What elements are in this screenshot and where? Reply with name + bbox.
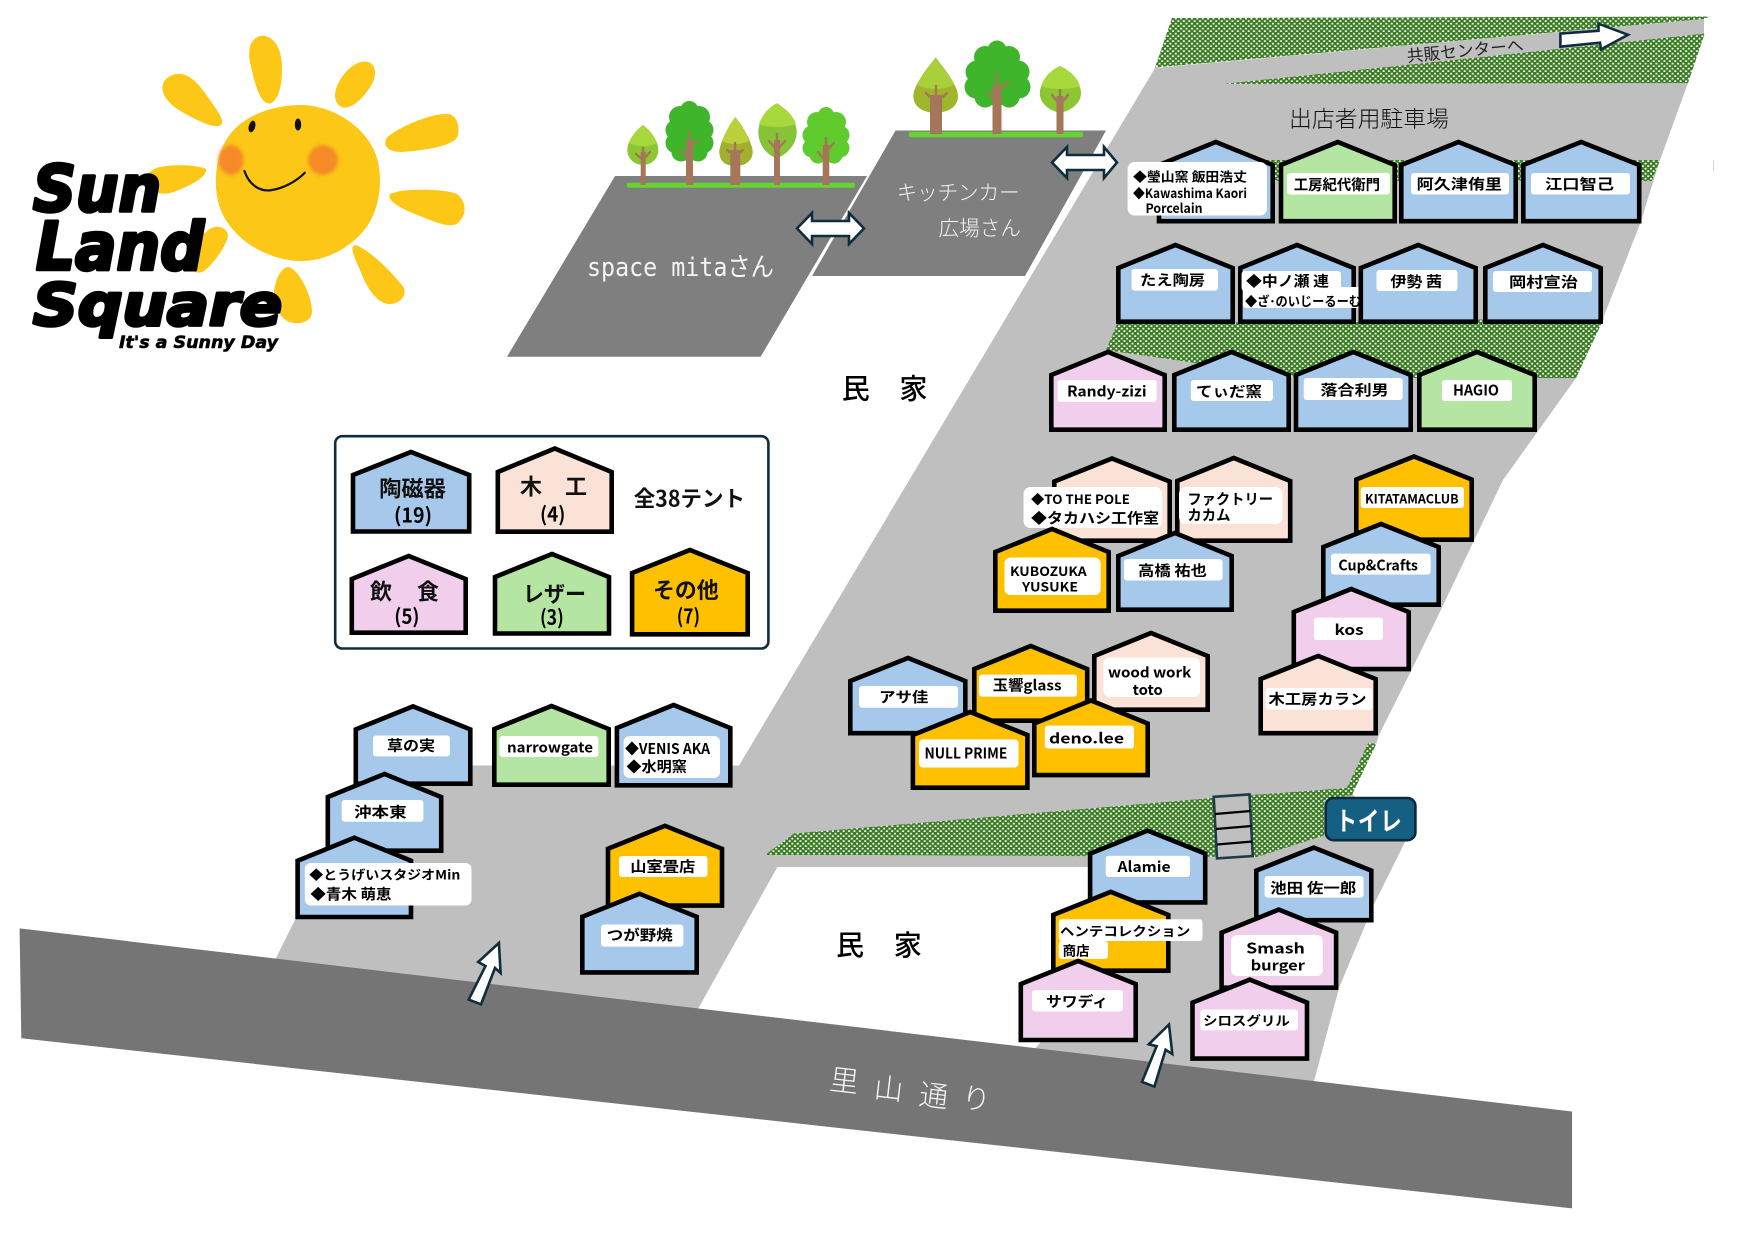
tent: NULL PRIME: NULL PRIME bbox=[924, 742, 1007, 763]
tent: KITATAMACLUB bbox=[1356, 456, 1472, 540]
tent: Nakanose Ren / The Nostalgie Room: ◆ざ･のいじーるーむ bbox=[1245, 291, 1361, 310]
tree 5 bbox=[802, 107, 850, 185]
arrow: kitchen plaza to parking bbox=[1052, 147, 1117, 178]
legend: leather bbox=[495, 554, 609, 634]
tent: Eguchi Satomi bbox=[1523, 142, 1639, 221]
label: to co-op centre: 共販センターへ bbox=[1406, 32, 1524, 67]
tent: Okamura Nobuharu: 岡村宣治 bbox=[1509, 272, 1579, 292]
tent: NULL PRIME bbox=[913, 712, 1027, 788]
tent: deno.lee bbox=[1034, 700, 1148, 775]
tent: Yamamuro tatami: 山室畳店 bbox=[630, 856, 695, 877]
tent: Ikeda Saichiro: 池田 佐一郎 bbox=[1270, 878, 1357, 898]
label: private house upper: 民 bbox=[842, 368, 870, 408]
grass: between tent rows two and three bbox=[1106, 318, 1604, 378]
logo: wordmark: Square bbox=[33, 271, 282, 339]
parcel: space mita bbox=[507, 176, 867, 357]
tent: Cup&Crafts: Cup&Crafts bbox=[1338, 554, 1418, 576]
tent: Woodcraft Karan bbox=[1261, 656, 1376, 733]
tent: Okamura Nobuharu bbox=[1485, 245, 1601, 322]
logo: sun illustration bbox=[145, 36, 465, 323]
legend: food: (5) bbox=[394, 600, 420, 630]
tent: wood work toto: wood work bbox=[1108, 661, 1192, 682]
tent: Alamie: Alamie bbox=[1116, 856, 1171, 877]
tent: Ochiai Toshio bbox=[1296, 352, 1411, 430]
tent: Takahashi Yuya: 高橋 祐也 bbox=[1138, 560, 1207, 581]
tent: Akutsu Yuri: 阿久津侑里 bbox=[1417, 174, 1502, 194]
legend: ceramics bbox=[353, 452, 469, 532]
tent: Ceramic Studio Min / Aoki Moe bbox=[298, 838, 472, 917]
legend: woodwork bbox=[498, 448, 612, 532]
tent: Tamayura glass bbox=[974, 646, 1087, 721]
tent: TO THE POLE / Takahashi workshop bbox=[1024, 458, 1170, 541]
grass: top strip above lane bbox=[1155, 16, 1710, 68]
stray mark near right edge bbox=[1713, 160, 1714, 171]
tagline: It's a Sunny Day bbox=[119, 333, 279, 353]
tent: Kobo Kiyoemon bbox=[1281, 142, 1395, 221]
tent: Tida kiln bbox=[1174, 352, 1289, 430]
legend panel bbox=[335, 436, 768, 648]
tent: Eguchi Satomi: 江口智己 bbox=[1545, 174, 1614, 194]
tree 3 bbox=[719, 117, 753, 185]
tent: Smash burger bbox=[1222, 910, 1336, 988]
tent: narrowgate bbox=[494, 706, 609, 785]
tent: Alamie bbox=[1090, 831, 1205, 902]
trees: space mita row bbox=[627, 101, 855, 188]
arrow: entrance left bbox=[469, 943, 501, 1004]
tent: VENIS AKA / Suimei kiln: ◆VENIS AKA bbox=[625, 738, 711, 759]
tent: Shiro's Grill: シロスグリル bbox=[1203, 1011, 1290, 1030]
legend: other: その他 bbox=[653, 573, 719, 605]
legend: leather: レザー bbox=[523, 577, 586, 609]
tent: Kobo Kiyoemon: 工房紀代衛門 bbox=[1294, 174, 1380, 195]
tent: Tamayura glass: 玉響glass bbox=[993, 674, 1062, 696]
tent: Akutsu Yuri bbox=[1401, 142, 1516, 221]
tent: Ceramic Studio Min / Aoki Moe: ◆青木 萌恵 bbox=[310, 884, 392, 904]
tent: Yamamuro tatami bbox=[608, 826, 722, 906]
tent: Ise Akane bbox=[1361, 245, 1476, 322]
tent: Ceramic Studio Min / Aoki Moe: ◆とうげいスタジオMin bbox=[309, 864, 460, 883]
label: private house lower: 家 bbox=[894, 924, 922, 964]
sun rays bbox=[145, 36, 465, 323]
tent: Ochiai Toshio: 落合利男 bbox=[1320, 380, 1389, 400]
tree b bbox=[964, 40, 1030, 134]
tent: Eizan kiln / Kawashima Kaori Porcelain: ◆Kawashima Kaori bbox=[1133, 183, 1247, 202]
street name: 里 bbox=[828, 1056, 861, 1102]
tent: VENIS AKA / Suimei kiln bbox=[617, 705, 730, 785]
tent: HAGIO bbox=[1419, 352, 1535, 430]
parcel: kitchen car plaza: キッチンカー bbox=[897, 177, 1020, 207]
arrow: entrance right bbox=[1142, 1024, 1172, 1087]
tent: Shiro's Grill bbox=[1192, 980, 1307, 1059]
tree 1 bbox=[627, 125, 658, 185]
tent: Eizan kiln / Kawashima Kaori Porcelain: ◆瑩山窯 飯田浩丈 bbox=[1133, 166, 1247, 186]
parcel: kitchen car plaza: 広場さん bbox=[938, 212, 1021, 242]
label: exhibitor parking: 出店者用駐車場 bbox=[1289, 102, 1449, 134]
street name: 山 bbox=[872, 1064, 906, 1110]
tent: TO THE POLE / Takahashi workshop: ◆タカハシ工作室 bbox=[1031, 508, 1159, 528]
tent: KITATAMACLUB: KITATAMACLUB bbox=[1365, 488, 1459, 508]
logo: wordmark: Land bbox=[36, 208, 205, 286]
parcel: kitchen car plaza bbox=[812, 130, 1106, 276]
tent: Randy-zizi bbox=[1051, 352, 1165, 430]
tent: VENIS AKA / Suimei kiln: ◆水明窯 bbox=[626, 756, 687, 777]
tent: Smash burger: burger bbox=[1251, 955, 1306, 976]
tent: Okimoto Azuma: 沖本東 bbox=[354, 801, 407, 822]
tent: Kusanomi: 草の実 bbox=[387, 735, 435, 756]
street: Satoyama-dori bbox=[20, 928, 1572, 1208]
tent: Factory Kakamu: ファクトリー bbox=[1187, 488, 1273, 510]
tent: Nakanose Ren / The Nostalgie Room bbox=[1240, 245, 1365, 322]
legend: ceramics: (19) bbox=[394, 500, 432, 528]
tent: Tae pottery: たえ陶房 bbox=[1140, 270, 1205, 290]
tree a bbox=[913, 57, 958, 134]
tent: Hente Collection Shoten bbox=[1053, 892, 1202, 971]
tent: Tida kiln: てぃだ窯 bbox=[1196, 381, 1262, 402]
tent: wood work toto: toto bbox=[1133, 679, 1163, 700]
tent: Cup&Crafts bbox=[1323, 524, 1439, 605]
tent: Ise Akane: 伊勢 茜 bbox=[1390, 271, 1442, 292]
grass: lower strip by toilet bbox=[767, 743, 1376, 857]
tent: Eizan kiln / Kawashima Kaori Porcelain bbox=[1128, 142, 1273, 221]
legend: other: (7) bbox=[677, 600, 700, 630]
tent: Ikeda Saichiro bbox=[1256, 848, 1371, 920]
tent: TO THE POLE / Takahashi workshop: ◆TO THE POLE bbox=[1031, 489, 1130, 508]
tent: Tae pottery bbox=[1118, 245, 1233, 322]
sun face bbox=[216, 105, 380, 261]
tent: Okimoto Azuma bbox=[328, 774, 441, 851]
tent: Hente Collection Shoten: 商店 bbox=[1063, 941, 1090, 960]
tent: Factory Kakamu: カカム bbox=[1187, 504, 1230, 526]
tent: Takahashi Yuya bbox=[1118, 533, 1232, 610]
tent: Sawadee: サワディ bbox=[1046, 991, 1108, 1012]
label: private house lower: 民 bbox=[836, 924, 864, 964]
tent: Smash burger: Smash bbox=[1246, 937, 1305, 958]
tent: Kusanomi bbox=[356, 706, 470, 784]
tent: Nakanose Ren / The Nostalgie Room: ◆中ノ瀬 連 bbox=[1246, 270, 1330, 292]
label: private house upper: 家 bbox=[899, 368, 927, 408]
logo: wordmark bbox=[33, 153, 282, 353]
tree c bbox=[1040, 66, 1081, 134]
tent: Sawadee bbox=[1021, 961, 1136, 1040]
trees: kitchen car row bbox=[909, 40, 1083, 137]
legend: food: 飲 食 bbox=[370, 574, 439, 606]
tent: KUBOZUKA YUSUKE bbox=[995, 529, 1109, 611]
tent: KUBOZUKA YUSUKE: KUBOZUKA bbox=[1010, 561, 1087, 580]
stairs bbox=[1214, 794, 1253, 858]
tent: HAGIO: HAGIO bbox=[1453, 380, 1499, 400]
legend: food bbox=[352, 556, 466, 633]
label: private house upper bbox=[842, 368, 927, 408]
street name bbox=[828, 1056, 993, 1120]
tree 4 bbox=[758, 103, 797, 185]
legend: leather: (3) bbox=[540, 602, 564, 630]
market ground: grey lanes bbox=[274, 19, 1704, 1085]
tent: deno.lee: deno.lee bbox=[1049, 728, 1124, 748]
arrow: to the co-op centre bbox=[1560, 24, 1628, 49]
tent: Randy-zizi: Randy-zizi bbox=[1067, 380, 1147, 402]
legend: woodwork: 木 工 bbox=[520, 470, 587, 502]
street name: り bbox=[960, 1074, 993, 1120]
tent: Woodcraft Karan: 木工房カラン bbox=[1268, 688, 1366, 710]
grass: behind first tent row bbox=[1250, 160, 1660, 181]
tent: Tsugano ware bbox=[582, 894, 697, 972]
tent: Asaka bbox=[850, 658, 965, 733]
tent: kos bbox=[1294, 589, 1409, 669]
tent: Hente Collection Shoten: ヘンテコレクション bbox=[1060, 921, 1190, 940]
parcel: space mita: space mitaさん bbox=[587, 253, 774, 283]
tent: Factory Kakamu bbox=[1177, 458, 1290, 541]
legend: other bbox=[632, 550, 748, 634]
legend: ceramics: 陶磁器 bbox=[379, 472, 446, 504]
tent: narrowgate: narrowgate bbox=[507, 736, 593, 758]
tree 2 bbox=[666, 101, 714, 185]
label: private house lower bbox=[836, 924, 922, 964]
legend: total tents: 全38テント bbox=[634, 481, 745, 513]
legend: woodwork: (4) bbox=[540, 498, 565, 528]
tent: Eizan kiln / Kawashima Kaori Porcelain: Porcelain bbox=[1146, 198, 1202, 217]
grass: strip below lane bbox=[1223, 34, 1705, 84]
tent: kos: kos bbox=[1334, 619, 1364, 640]
tent: wood work toto bbox=[1094, 633, 1208, 710]
street name: 通 bbox=[917, 1071, 951, 1117]
tent: KUBOZUKA YUSUKE: YUSUKE bbox=[1021, 576, 1078, 596]
logo: wordmark: Sun bbox=[33, 153, 161, 227]
tent: Tsugano ware: つが野焼 bbox=[607, 924, 673, 946]
tent: Asaka: アサ佳 bbox=[879, 686, 929, 708]
arrow: between space mita and kitchen plaza bbox=[797, 213, 864, 244]
toilet sign: トイレ bbox=[1336, 802, 1403, 838]
